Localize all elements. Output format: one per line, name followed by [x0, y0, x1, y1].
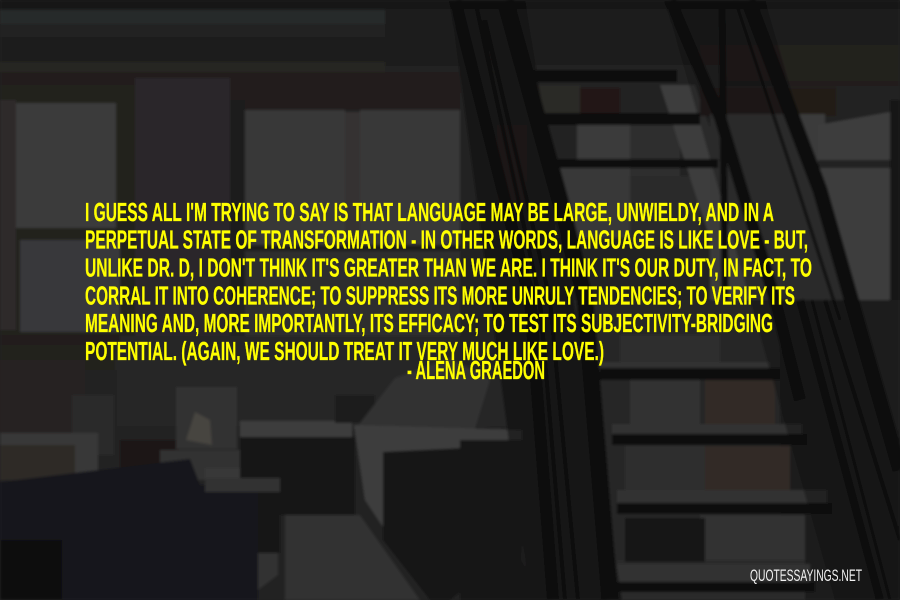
foreground sofa: [0, 459, 280, 600]
glass lantern and side table: [120, 387, 280, 480]
stair treads: [533, 70, 832, 592]
quote text: [85, 197, 812, 366]
staircase railings and stringers: [455, 0, 900, 600]
staircase shadow bundles: [450, 0, 900, 600]
author attribution: - ALENA GRAEDON: [407, 355, 545, 385]
middle window: [230, 80, 470, 336]
lower wall: [115, 336, 535, 426]
left window: [0, 85, 135, 385]
right window and curtain: [700, 88, 900, 600]
armchair with pillows: [0, 360, 117, 480]
ceiling: [0, 0, 900, 86]
floor: [285, 515, 420, 600]
back wall behind staircase: [460, 65, 770, 365]
right sofa: [354, 358, 540, 600]
stair tread faces: [600, 362, 827, 582]
wall between windows: [135, 78, 230, 378]
lower staircase backdrop: [540, 300, 805, 600]
centre sofa: [240, 395, 375, 515]
